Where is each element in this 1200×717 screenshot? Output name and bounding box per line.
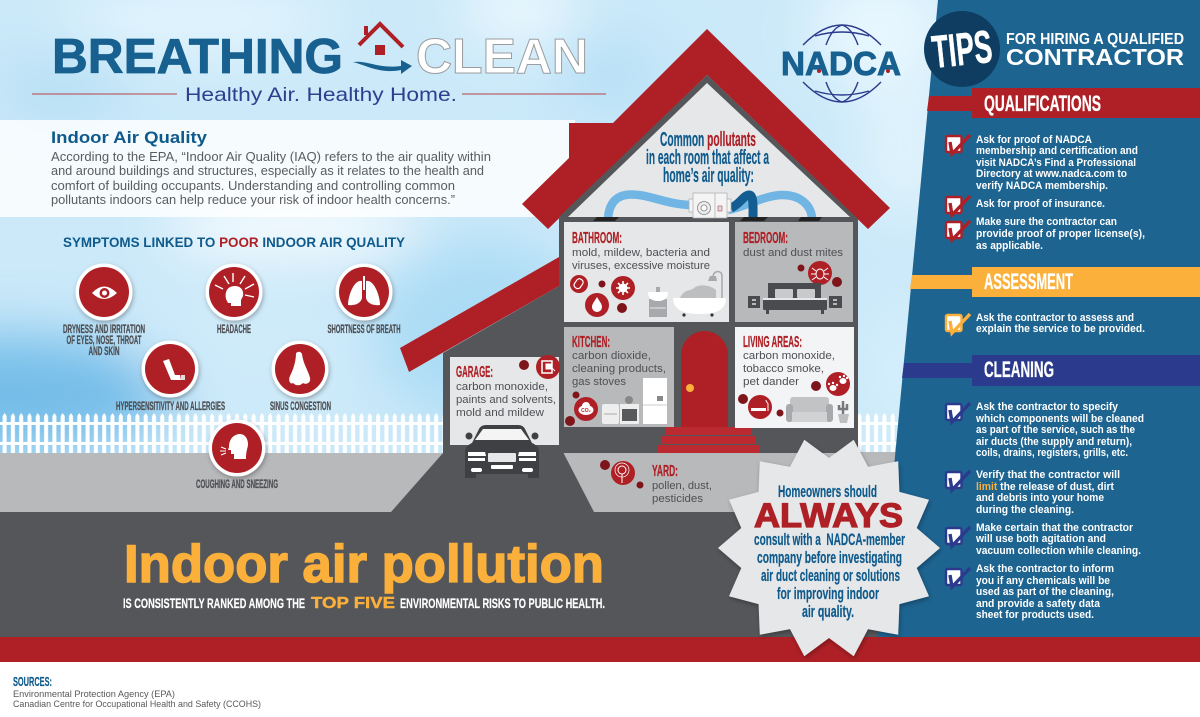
cleaning tip 2: Verify that the contractor will: [976, 469, 1120, 481]
icon: sofa: [786, 397, 833, 422]
room: bathroom: [564, 222, 729, 322]
intro text: indoor air quality: and around buildings and structures, especially as it relates to the health and: [51, 164, 484, 178]
house wall: [559, 75, 858, 453]
cleaning tip 2: during the cleaning.: [976, 504, 1074, 516]
icon: cactus: [838, 401, 849, 423]
sources: Canadian Centre for Occupational Health and Safety (CCOHS): [13, 699, 261, 710]
icon: kitchen appliances: [602, 378, 667, 424]
cleaning tip 4: [976, 563, 1114, 621]
cleaning tip 3: will use both agitation and: [975, 533, 1106, 545]
title: CLEAN: [416, 30, 588, 84]
section: assessment: ASSESSMENT: [984, 269, 1073, 294]
ground and driveway: [0, 452, 1200, 638]
starburst callout: company before investigating: [757, 548, 902, 567]
cleaning tip 4: you if any chemicals will be: [976, 575, 1110, 587]
cleaning tip 4: sheet for products used.: [976, 609, 1094, 621]
sources: Environmental Protection Agency (EPA): [13, 689, 175, 700]
garage wall: [443, 286, 559, 453]
symptom: shortness of breath: SHORTNESS OF BREATH: [328, 324, 400, 336]
cleaning tip 2: and debris into your home: [976, 492, 1104, 504]
attic heading: home’s air quality:: [663, 165, 754, 187]
room: bathroom: BATHROOM:: [572, 230, 622, 247]
cleaning tip 3: vacuum collection while cleaning.: [976, 545, 1141, 557]
sources: SOURCES:: [13, 674, 52, 689]
cleaning tip 1: Ask the contractor to specify: [976, 401, 1118, 413]
room: bathroom: mold, mildew, bacteria and: [572, 247, 710, 259]
check icon: [946, 527, 970, 546]
headline: indoor air pollution: IS CONSISTENTLY RANKED AMONG THE: [123, 595, 305, 611]
section: qualifications: QUALIFICATIONS: [984, 91, 1101, 116]
icon: bed: [748, 283, 842, 314]
check icon: [946, 196, 970, 215]
assessment tip: [976, 312, 1145, 335]
yard: pollen, dust,: [652, 480, 712, 492]
cleaning tip 1: as part of the service, such as the: [976, 424, 1135, 436]
room: living areas: LIVING AREAS:: [743, 334, 802, 351]
room: kitchen: KITCHEN:: [572, 334, 610, 351]
headline: indoor air pollution: TOP FIVE: [311, 595, 395, 612]
qualification tip 3: [976, 216, 1145, 252]
room: kitchen: cleaning products,: [572, 363, 666, 375]
qualification tip 1: visit NADCA’s Find a Professional: [976, 157, 1136, 169]
icon: house and airflow arrow: [353, 24, 412, 74]
intro text: indoor air quality: According to the EPA, “Indoor Air Quality (IAQ) refers to the air quality within: [51, 150, 491, 164]
room: garage: [450, 355, 560, 478]
yard: pesticides: [652, 493, 703, 505]
icon: car: [465, 425, 539, 478]
room: kitchen: [564, 327, 674, 427]
icon: sink: [648, 287, 668, 317]
section: cleaning: [902, 355, 1200, 386]
attic heading: in each room that affect a: [646, 147, 769, 169]
check icon: [946, 568, 970, 587]
cleaning tip 3: [975, 522, 1141, 557]
intro text: indoor air quality: comfort of building occupants. Understanding and controlling common: [51, 179, 455, 193]
room: garage: paints and solvents,: [456, 394, 556, 406]
icon: bathtub: [673, 272, 726, 317]
fence: [0, 413, 908, 453]
assessment tip: explain the service to be provided.: [976, 323, 1145, 335]
qualification tip 1: membership and certification and: [976, 145, 1138, 157]
title: [52, 24, 588, 84]
cleaning tip 1: [975, 401, 1144, 459]
icon: paint can: [536, 355, 560, 379]
cleaning tip 1: coils, drains, registers, grills, etc.: [976, 447, 1128, 459]
symptom: headache: HEADACHE: [217, 324, 251, 336]
qualification tip 3: as applicable.: [976, 240, 1043, 252]
symptoms heading: SYMPTOMS LINKED TO POOR INDOOR AIR QUALITY: [63, 234, 406, 250]
room: living areas: pet dander: [743, 376, 799, 388]
red footer band: [0, 637, 1200, 662]
cleaning tip 2: [976, 469, 1120, 516]
room: garage: mold and mildew: [456, 407, 545, 419]
symptom: headache: [206, 264, 262, 336]
qualification tip 3: provide proof of proper license(s),: [976, 228, 1145, 240]
door: [658, 331, 759, 453]
symptom: dryness and irritation: DRYNESS AND IRRITATION: [63, 324, 145, 336]
symptom: dryness and irritation: [63, 264, 145, 358]
symptom: sinus congestion: SINUS CONGESTION: [270, 401, 331, 413]
room: bedroom: BEDROOM:: [743, 230, 788, 247]
symptoms: [63, 264, 400, 491]
intro text: indoor air quality: pollutants indoors can help reduce your risk of indoor health concerns.”: [51, 193, 455, 207]
white intro band: [0, 120, 575, 217]
symptom: dryness and irritation: AND SKIN: [88, 346, 120, 358]
tips heading: CONTRACTOR: [1006, 44, 1184, 70]
symptom: coughing and sneezing: COUGHING AND SNEEZING: [196, 479, 278, 491]
qualification tip 3: Make sure the contractor can: [976, 216, 1117, 228]
qualification tip 1: verify NADCA membership.: [976, 180, 1108, 192]
attic: [568, 83, 850, 217]
icon: cigarette: [748, 395, 772, 419]
room: bedroom: [735, 222, 853, 322]
symptom: shortness of breath: [328, 264, 400, 336]
icon: water drop: [585, 293, 609, 317]
qualification tip 1: Ask for proof of NADCA: [976, 134, 1092, 146]
cleaning tip 4: and provide a safety data: [976, 598, 1100, 610]
subtitle: Healthy Air. Healthy Home.: [185, 84, 457, 106]
starburst callout: consult with a NADCA-member: [754, 530, 905, 549]
room: kitchen: gas stoves: [572, 376, 626, 388]
cleaning tip 4: used as part of the cleaning,: [976, 586, 1114, 598]
section: qualifications: [902, 88, 1200, 621]
room: living areas: [735, 327, 854, 428]
symptom: hypersensitivity and allergies: [116, 340, 225, 413]
starburst callout: for improving indoor: [777, 584, 879, 603]
attic heading: Common pollutants: [660, 129, 756, 151]
cleaning tip 1: air ducts (the supply and return),: [976, 436, 1132, 448]
room: bedroom: dust and dust mites: [743, 247, 843, 259]
icon: pollen: [611, 461, 635, 485]
tips badge: [924, 11, 1000, 87]
check icon: [946, 135, 970, 154]
room: kitchen: carbon dioxide,: [572, 350, 651, 362]
roof: [522, 29, 890, 229]
cleaning tip 4: Ask the contractor to inform: [976, 563, 1114, 575]
symptom: hypersensitivity and allergies: HYPERSENSITIVITY AND ALLERGIES: [116, 401, 225, 413]
cleaning tip 3: Make certain that the contractor: [976, 522, 1133, 534]
house: [400, 29, 890, 453]
headline: indoor air pollution: ENVIRONMENTAL RISKS TO PUBLIC HEALTH.: [400, 595, 605, 611]
qualification tip 2: Ask for proof of insurance.: [976, 198, 1105, 210]
yard: YARD:: [652, 463, 678, 480]
starburst callout: [718, 440, 940, 656]
intro text: indoor air quality: Indoor Air Quality: [51, 128, 208, 147]
icon: CO2 cloud: CO₂: [581, 408, 591, 414]
attic heading: [646, 129, 769, 187]
white footer: [0, 662, 1200, 717]
room: living areas: carbon monoxide,: [743, 350, 835, 362]
tips heading: FOR HIRING A QUALIFIED: [1006, 31, 1184, 48]
air ducts and HVAC unit: [593, 193, 822, 221]
check icon: [946, 314, 970, 333]
section: cleaning: CLEANING: [984, 357, 1054, 382]
starburst callout: ALWAYS: [754, 497, 903, 535]
headline: indoor air pollution: Indoor air pollution: [124, 535, 604, 594]
room: garage: carbon monoxide,: [456, 381, 548, 393]
room: bathroom: viruses, excessive moisture: [572, 260, 710, 272]
cleaning tip 1: which components will be cleaned: [975, 413, 1144, 425]
assessment tip: Ask the contractor to assess and: [976, 312, 1134, 324]
cleaning tip 2: limit the release of dust, dirt: [976, 481, 1114, 493]
room: garage: GARAGE:: [456, 364, 493, 381]
room: living areas: tobacco smoke,: [743, 363, 824, 375]
check icon: [946, 403, 970, 422]
icon: paw prints: [826, 372, 850, 396]
section: assessment: [910, 267, 1200, 297]
intro text: indoor air quality: [51, 128, 491, 207]
yard: [600, 460, 712, 505]
tips heading: [1006, 31, 1184, 70]
garage roof: [400, 257, 559, 372]
starburst callout: air quality.: [802, 602, 854, 621]
starburst callout: Homeowners should: [778, 482, 877, 501]
tips badge: TIPS: [929, 20, 995, 78]
symptom: coughing and sneezing: [196, 420, 278, 491]
symptom: dryness and irritation: OF EYES, NOSE, THROAT: [66, 335, 142, 347]
qualification tip 1: [976, 134, 1138, 192]
check icon: [946, 471, 970, 490]
icon: mold: [570, 275, 588, 293]
sources: [13, 674, 261, 710]
icon: virus: [611, 276, 635, 300]
check icon: [946, 221, 970, 240]
title: BREATHING: [52, 30, 343, 84]
symptom: sinus congestion: [270, 340, 331, 413]
qualification tip 1: Directory at www.nadca.com to: [976, 168, 1128, 180]
NADCA logo: [781, 25, 901, 102]
starburst callout: air duct cleaning or solutions: [761, 566, 900, 585]
NADCA logo: NADCA: [781, 45, 901, 82]
icon: dust mite: [808, 261, 832, 285]
